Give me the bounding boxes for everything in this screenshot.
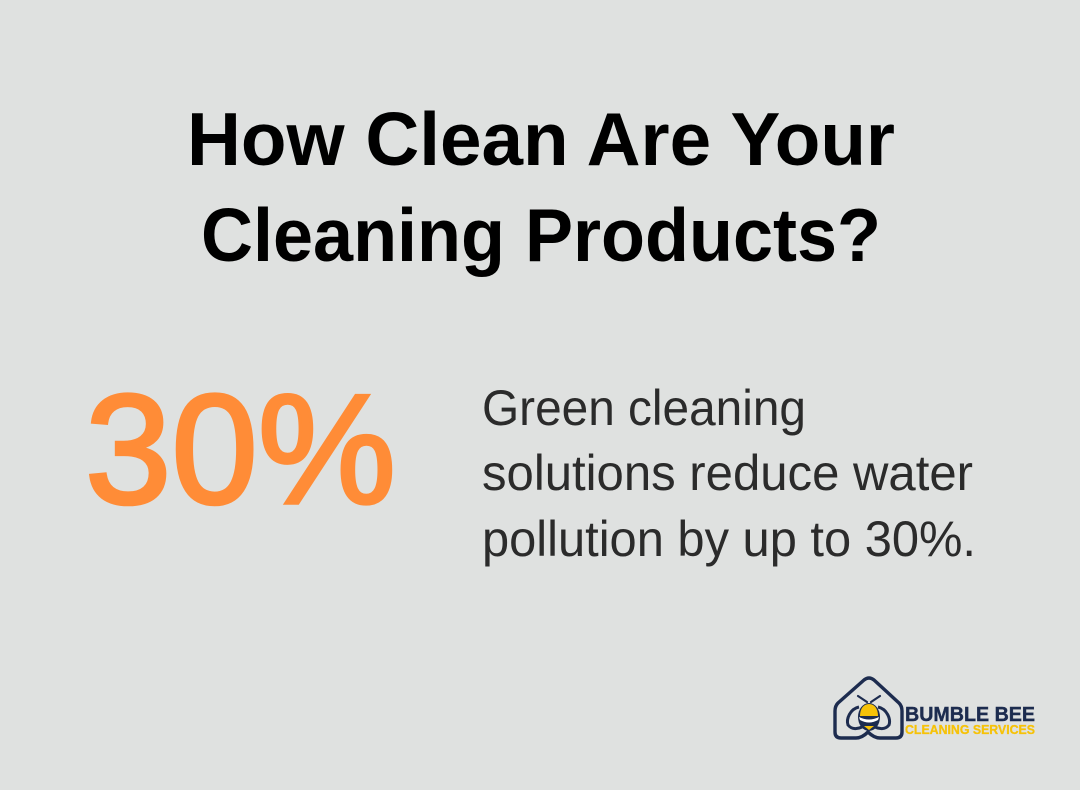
description text: solutions reduce water [482, 445, 973, 501]
logo: Bumble Bee Cleaning Services [835, 678, 1035, 738]
description text: Green cleaning [482, 380, 806, 436]
description text: pollution by up to 30%. [482, 511, 976, 567]
logo name: BUMBLE BEE [905, 704, 1035, 726]
big stat: 30%: 30% [85, 363, 396, 537]
description text [482, 380, 976, 567]
icon: house outline [835, 678, 902, 738]
logo tagline: CLEANING SERVICES [905, 723, 1035, 737]
title: Cleaning Products? [201, 193, 881, 277]
title [187, 97, 895, 277]
icon: bee [847, 696, 890, 731]
title: How Clean Are Your [187, 97, 895, 181]
